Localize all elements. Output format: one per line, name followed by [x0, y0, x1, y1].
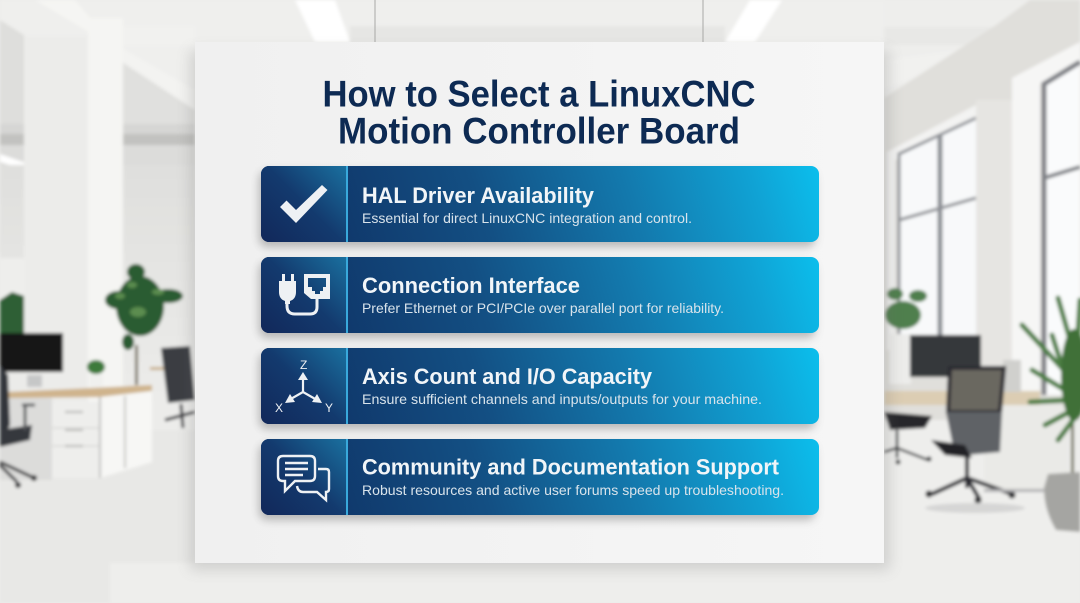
left monitor — [0, 333, 63, 372]
panel shadow — [190, 50, 890, 570]
right window one — [887, 105, 976, 350]
right back chair — [884, 412, 932, 430]
planter — [1044, 472, 1080, 532]
title: Motion Controller Board — [338, 110, 740, 152]
right wall — [884, 0, 1080, 430]
title: How to Select a LinuxCNC — [322, 74, 756, 114]
right tree — [1071, 420, 1074, 480]
title — [322, 74, 756, 152]
icon: XYZ axes: Y — [325, 401, 333, 415]
card heading: HAL Driver Availability — [362, 183, 595, 208]
left desk — [8, 385, 152, 398]
right desk — [884, 391, 1040, 405]
icon: plug and ethernet port — [279, 274, 330, 314]
card: HAL Driver Availability — [259, 166, 819, 247]
left chairs — [0, 365, 10, 445]
small plant — [87, 360, 105, 374]
right plant behind — [885, 288, 927, 329]
right main chair — [948, 368, 1004, 412]
icon: check mark — [280, 185, 328, 223]
icon: XYZ axes — [275, 358, 333, 415]
card heading: Axis Count and I/O Capacity — [362, 364, 653, 389]
floor — [0, 430, 195, 603]
card description: Robust resources and active user forums speed up troubleshooting. — [362, 482, 784, 498]
icon: XYZ axes: Z — [300, 358, 307, 372]
card heading: Community and Documentation Support — [362, 454, 780, 480]
left column — [24, 36, 88, 446]
ceiling right — [884, 0, 1080, 100]
ceiling centre and lights — [195, 0, 884, 44]
ceiling left — [0, 0, 300, 130]
card heading: Connection Interface — [362, 273, 580, 298]
card description: Essential for direct LinuxCNC integration and control. — [362, 210, 692, 226]
card: Community and Documentation Support — [259, 439, 819, 520]
icon: chat bubbles — [278, 456, 329, 500]
wall behind — [0, 165, 195, 405]
card: Connection Interface — [259, 257, 819, 338]
hanging wires — [375, 0, 703, 43]
icon: XYZ axes: X — [275, 401, 283, 415]
white sign panel — [195, 42, 884, 563]
card: Axis Count and I/O Capacity — [259, 348, 819, 429]
left tree — [135, 345, 138, 385]
card description: Prefer Ethernet or PCI/PCIe over parallel port for reliability. — [362, 300, 724, 316]
right column and reveal — [976, 100, 1012, 395]
floor shadows — [925, 503, 1025, 513]
card description: Ensure sufficient channels and inputs/outputs for your machine. — [362, 391, 762, 407]
right window two — [1042, 62, 1080, 395]
far left plant — [0, 292, 24, 333]
right monitor — [910, 335, 981, 377]
